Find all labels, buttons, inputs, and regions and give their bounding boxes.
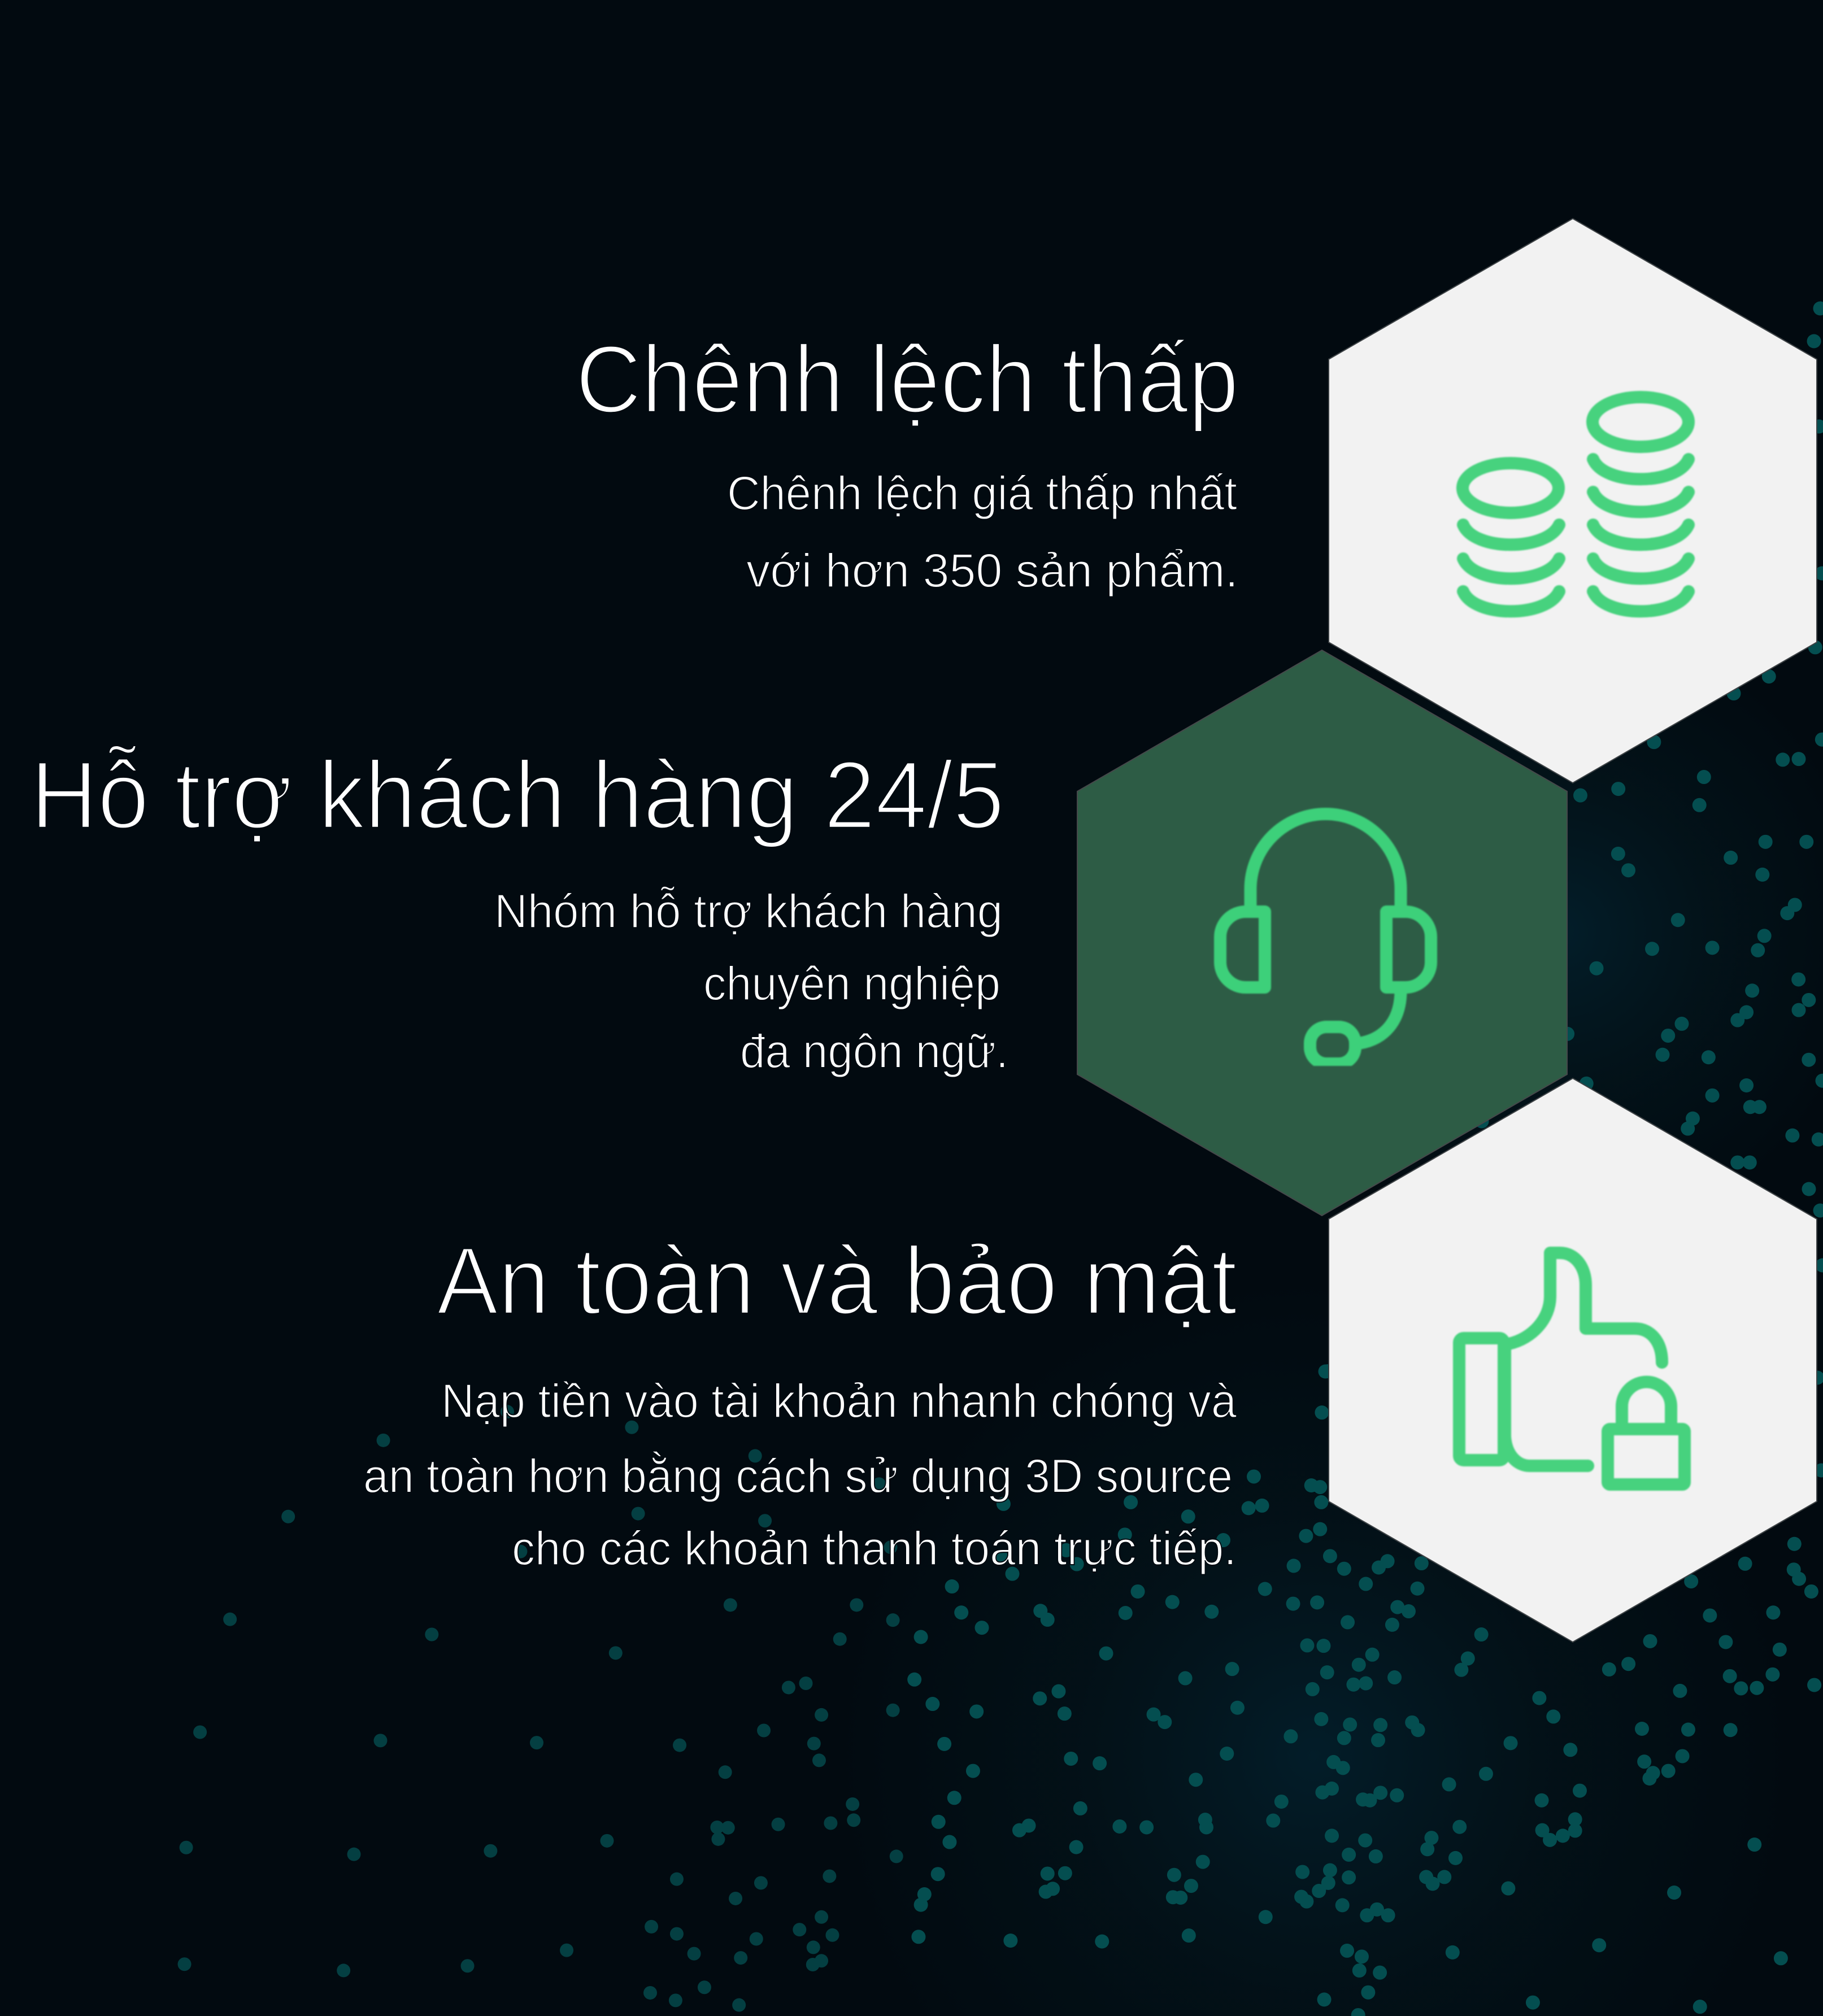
icon: coins <box>1463 397 1689 611</box>
hexagon: low spread <box>1329 219 1817 783</box>
text: support description: Nhóm hỗ trợ khách hàng <box>494 885 1003 938</box>
heading: support: Hỗ trợ khách hàng 24/5 <box>31 742 1004 849</box>
text: security description: Nạp tiền vào tài khoản nhanh chóng và <box>441 1374 1237 1427</box>
hexagon: support <box>1077 650 1567 1216</box>
text: security description: cho các khoản thanh toán trực tiếp. <box>512 1522 1237 1575</box>
particle dots <box>185 308 1822 2015</box>
text: low spread description: Chênh lệch giá thấp nhất <box>727 467 1237 520</box>
text: support description <box>494 885 1008 1078</box>
text: security description <box>363 1374 1237 1575</box>
hexagon: security <box>1329 1078 1817 1642</box>
text: security description: an toàn hơn bằng cách sử dụng 3D source <box>363 1449 1233 1503</box>
icon: thumbs up with lock <box>1459 1253 1685 1484</box>
text: support description: chuyên nghiệp <box>703 957 1000 1010</box>
icon: headset <box>1220 814 1431 1064</box>
heading: security: An toàn và bảo mật <box>437 1227 1237 1335</box>
text: low spread description <box>727 467 1238 597</box>
text: low spread description: với hơn 350 sản phẩm. <box>746 544 1238 597</box>
text: support description: đa ngôn ngữ. <box>740 1025 1008 1078</box>
heading: low spread: Chênh lệch thấp <box>576 326 1239 433</box>
